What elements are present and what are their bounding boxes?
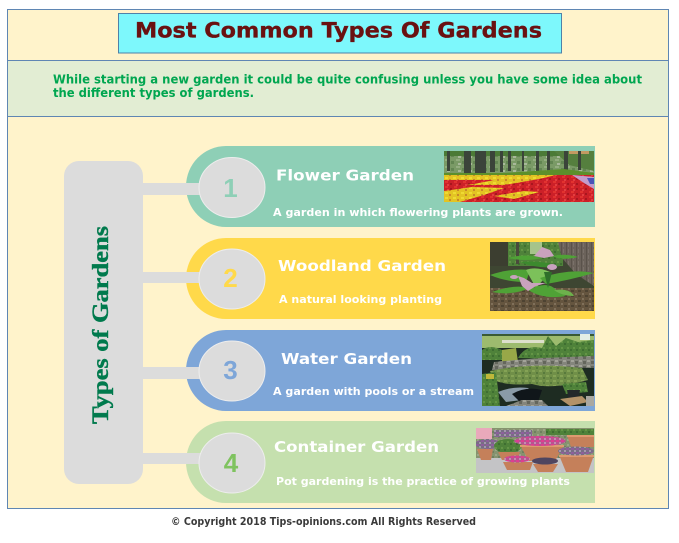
photo: pond <box>482 334 594 406</box>
panel: flower garden <box>143 146 595 227</box>
title box <box>118 14 562 53</box>
panel: woodland garden: A natural looking planting <box>279 293 442 306</box>
intro band: the different types of gardens. <box>53 85 254 100</box>
photo: flower pots <box>476 428 594 473</box>
types of gardens column <box>64 161 143 484</box>
panel: flower garden: 1 <box>223 173 238 203</box>
title box: Most Common Types Of Gardens <box>135 18 542 42</box>
panel: container garden <box>143 421 595 503</box>
photo: woodland plant <box>490 242 594 311</box>
panel: woodland garden: Woodland Garden <box>278 257 446 275</box>
panel: container garden: 4 <box>224 448 239 478</box>
intro band <box>8 60 668 116</box>
panel: woodland garden <box>143 238 595 319</box>
panel: container garden: Pot gardening is the practice of growing plants <box>276 475 570 488</box>
panel: water garden <box>143 330 595 411</box>
panel: water garden: A garden with pools or a stream <box>273 385 474 398</box>
panel: water garden: 3 <box>223 355 238 385</box>
intro band: While starting a new garden it could be quite confusing unless you have some idea about <box>53 72 642 86</box>
panel: container garden: Container Garden <box>274 438 439 456</box>
panel: water garden: Water Garden <box>281 350 412 368</box>
photo: tulip field <box>444 151 594 202</box>
panel: woodland garden: 2 <box>223 263 238 293</box>
panel: flower garden: Flower Garden <box>276 166 414 184</box>
panel: flower garden: A garden in which flowering plants are grown. <box>273 206 563 219</box>
copyright footer: © Copyright 2018 Tips-opinions.com All Rights Reserved <box>171 515 476 528</box>
types of gardens column: Types of Gardens <box>88 226 113 424</box>
